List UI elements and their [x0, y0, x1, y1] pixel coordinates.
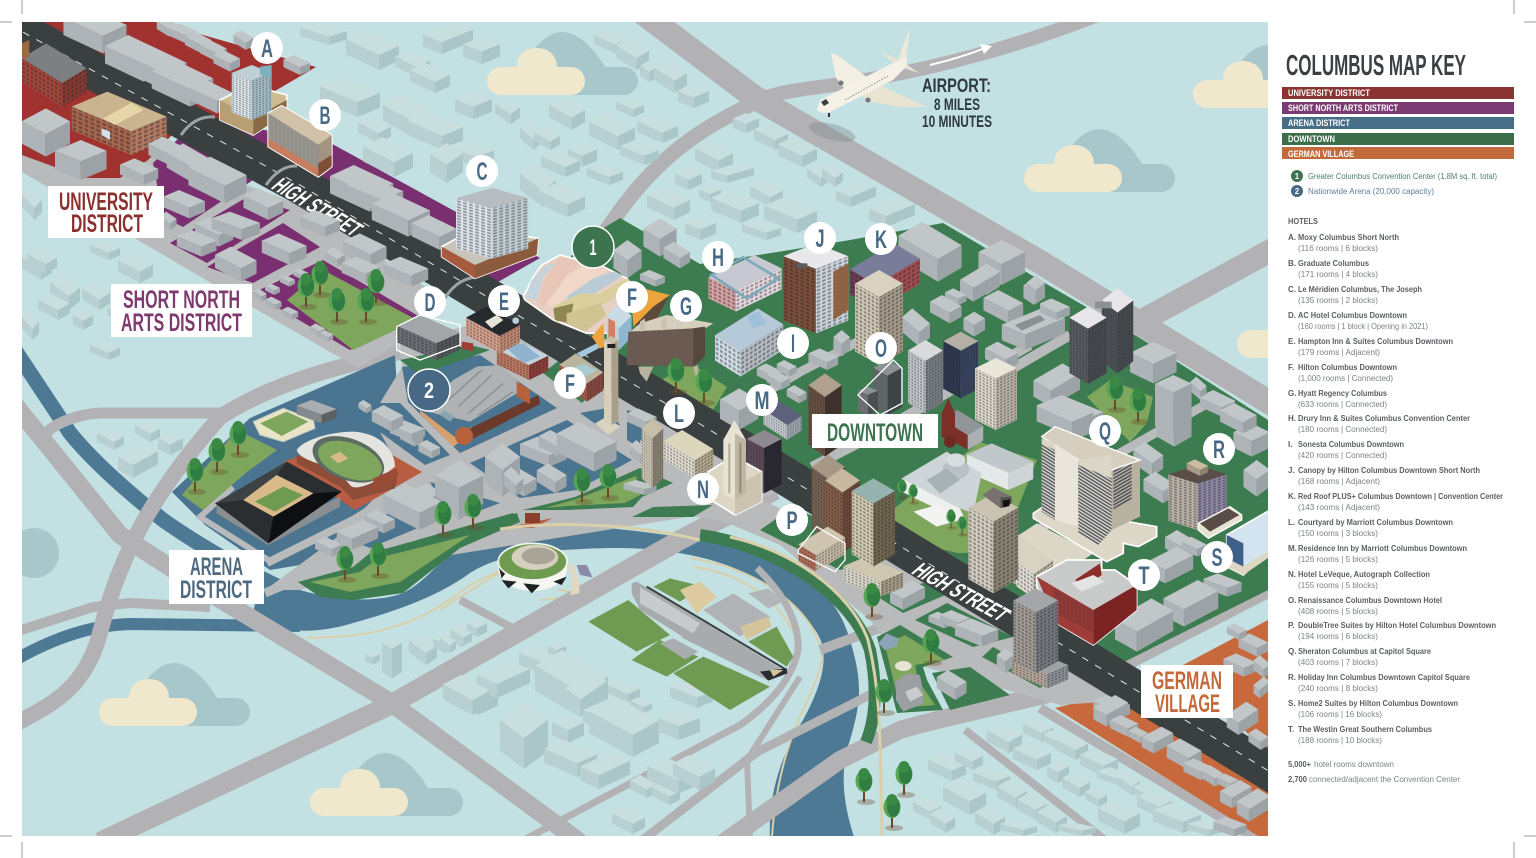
- building: Ohio Union: [72, 92, 167, 155]
- buildings: south park shell: [878, 633, 923, 712]
- hotel G: G.: [1288, 389, 1296, 398]
- hotel N: [1288, 570, 1430, 590]
- label: Arena District: [169, 550, 264, 604]
- downtown room totals: 2,700: [1288, 775, 1308, 784]
- building: Holiday Inn R: [1168, 459, 1242, 538]
- hotel letter badges: L: [674, 400, 684, 428]
- hotel N: (155 rooms | 5 blocks): [1298, 581, 1378, 590]
- hotel letter badges: O: [875, 335, 887, 363]
- hotel P: [1288, 621, 1496, 641]
- label: Arena District: DISTRICT: [180, 576, 252, 604]
- hotel F: (1,000 rooms | Connected): [1298, 374, 1393, 383]
- hotel C: [1288, 285, 1422, 305]
- hotel R: R.: [1288, 673, 1296, 682]
- district colour legend: UNIVERSITY DISTRICT: [1288, 88, 1370, 98]
- hotel R: Holiday Inn Columbus Downtown Capitol Square: [1298, 673, 1471, 682]
- hotel list: [1288, 233, 1503, 745]
- hotel Q: Q.: [1288, 647, 1296, 656]
- hotel O: [1288, 596, 1442, 616]
- building: Hilton F lower with skybridge: [497, 340, 607, 402]
- airport label: 8 MILES: [934, 95, 980, 114]
- hotel G: (633 rooms | Connected): [1298, 400, 1387, 409]
- hotel letter badges: [251, 32, 1235, 591]
- Downtown blocks north: [613, 218, 850, 430]
- building: Columbus tower near Holiday: [1012, 588, 1068, 688]
- district colour legend: SHORT NORTH ARTS DISTRICT: [1288, 103, 1398, 113]
- University and Short North blocks: [22, 7, 457, 342]
- building: Ohio Statehouse: [902, 443, 1033, 527]
- building: COSI science museum: [588, 578, 793, 710]
- building: Le Meridien C: [442, 188, 538, 278]
- hotel J: J.: [1288, 466, 1295, 475]
- downtown room totals: 5,000+: [1288, 760, 1311, 769]
- airplane: [817, 28, 927, 117]
- land: University District: [22, 22, 316, 178]
- hotel P: DoubleTree Suites by Hilton Hotel Columbus Downtown: [1298, 621, 1496, 630]
- tan river paths: [307, 558, 822, 836]
- district colour legend: DOWNTOWN: [1288, 134, 1335, 144]
- airplane shadow: [807, 118, 857, 146]
- hotel O: O.: [1288, 596, 1296, 605]
- hotel I: I.: [1288, 440, 1292, 449]
- buildings: Renaissance O and Downtown towers: [808, 332, 1017, 457]
- trees: [186, 261, 1149, 831]
- label: University District: [48, 186, 164, 238]
- building: Nationwide Arena: [420, 365, 540, 447]
- land: Arena District blue parcels: [345, 355, 643, 548]
- building: Center of Science dome: [498, 543, 593, 595]
- district colour legend: ARENA DISTRICT: [1288, 118, 1350, 128]
- hotel I: (420 rooms | Connected): [1298, 451, 1387, 460]
- building: Sheraton Q: [1033, 427, 1157, 562]
- hotel A: (116 rooms | 6 blocks): [1298, 244, 1378, 253]
- hotel D: AC Hotel Columbus Downtown: [1298, 311, 1407, 320]
- hotel C: C.: [1288, 285, 1296, 294]
- hotel Q: (403 rooms | 7 blocks): [1298, 658, 1378, 667]
- hotel F: F.: [1288, 363, 1294, 372]
- label: University District: DISTRICT: [71, 210, 143, 238]
- hotel M: [1288, 544, 1467, 564]
- hotel R: [1288, 673, 1471, 693]
- land: German Village: [1055, 620, 1268, 836]
- airport label: [922, 76, 992, 131]
- label: University District: UNIVERSITY: [59, 188, 153, 216]
- hotel T: [1288, 725, 1433, 745]
- hotel H: [1288, 414, 1470, 434]
- label: German Village: GERMAN: [1152, 667, 1222, 695]
- Downtown blocks east and south: [890, 377, 1270, 720]
- hotel H: Drury Inn & Suites Columbus Convention Center: [1298, 414, 1470, 423]
- label: German Village: VILLAGE: [1155, 690, 1220, 718]
- hotel letter badges: P: [786, 507, 798, 535]
- label: Arena District: ARENA: [190, 553, 243, 581]
- hotel E: [1288, 337, 1453, 357]
- building: Graduate B: [268, 106, 332, 177]
- hotel K: [1288, 492, 1503, 512]
- hotel A: Moxy Columbus Short North: [1298, 233, 1399, 242]
- label: Short North Arts District: SHORT NORTH: [123, 286, 240, 314]
- downtown room totals: [1288, 760, 1460, 784]
- hotel B: [1288, 259, 1378, 279]
- buildings: Canopy J, Red Roof K: [783, 243, 920, 365]
- hotel F: [1288, 363, 1397, 383]
- hotel G: [1288, 389, 1388, 409]
- hotel N: N.: [1288, 570, 1296, 579]
- land: Arena District street base: [265, 310, 790, 590]
- building: Hyatt F tower and Hyatt G: [592, 288, 713, 382]
- land: Short North Arts District: [153, 122, 540, 350]
- venue legend: 2: [1295, 187, 1300, 196]
- hotel Q: Sheraton Columbus at Capitol Square: [1298, 647, 1432, 656]
- hotel letter badges: A: [261, 35, 273, 63]
- hotel B: (171 rooms | 4 blocks): [1298, 270, 1378, 279]
- district colour legend: [1282, 87, 1514, 159]
- hotel letter badges: B: [320, 102, 330, 130]
- Downtown blocks north-east: [898, 222, 1103, 438]
- skybridges over High Street: [181, 117, 475, 300]
- hotel F: Hilton Columbus Downtown: [1298, 363, 1397, 372]
- hotel S: S.: [1288, 699, 1296, 708]
- hotel L: L.: [1288, 518, 1295, 527]
- hotel D: (160 rooms | 1 block | Opening in 2021): [1298, 322, 1428, 331]
- hotel letter badges: G: [680, 293, 692, 321]
- buildings: Drury H and Sonesta I: [708, 255, 783, 377]
- building: dark tower right: [1069, 288, 1133, 384]
- hotel letter badges: R: [1213, 436, 1225, 464]
- hotel T: T.: [1288, 725, 1294, 734]
- building: tall column tower: [595, 336, 620, 435]
- hotel L: [1288, 518, 1453, 538]
- hotel C: Le Méridien Columbus, The Joseph: [1298, 285, 1422, 294]
- hotel letter badges: Q: [1099, 418, 1111, 446]
- hotel M: Residence Inn by Marriott Columbus Downtown: [1298, 544, 1467, 553]
- hotel K: (143 rooms | Adjacent): [1298, 503, 1380, 512]
- label: Short North Arts District: ARTS DISTRICT: [121, 309, 242, 337]
- badge 1: [572, 226, 614, 268]
- downtown room totals: connected/adjacent the Convention Center: [1309, 775, 1460, 784]
- hotel E: E.: [1288, 337, 1296, 346]
- building: Moxy A: [220, 65, 287, 135]
- key panel: [1282, 50, 1514, 784]
- label: German Village: [1141, 665, 1233, 718]
- venue legend: 1: [1295, 172, 1300, 181]
- hotel I: Sonesta Columbus Downtown: [1298, 440, 1404, 449]
- hotel T: The Westin Great Southern Columbus: [1298, 725, 1433, 734]
- building: boathouse: [525, 513, 540, 523]
- hotel M: (126 rooms | 5 blocks): [1298, 555, 1378, 564]
- district colour legend: GERMAN VILLAGE: [1288, 149, 1354, 159]
- building: Home2 Suites S: [1227, 510, 1270, 575]
- hotel letter badges: C: [476, 158, 488, 186]
- High Street label south: HIGH STREET: [905, 559, 1016, 626]
- airport label: 10 MINUTES: [922, 112, 992, 131]
- venue legend: [1291, 170, 1497, 197]
- hotel H: (180 rooms | Connected): [1298, 425, 1387, 434]
- hotel letter badges: D: [424, 289, 436, 317]
- hotel N: Hotel LeVeque, Autograph Collection: [1298, 570, 1430, 579]
- label: Short North Arts District: [111, 284, 252, 337]
- land: south of High Street: [640, 440, 1130, 705]
- hotel B: B.: [1288, 259, 1296, 268]
- gray city buildings: [22, 7, 1270, 837]
- hotel S: Home2 Suites by Hilton Columbus Downtown: [1298, 699, 1458, 708]
- hotel letter badges: T: [1138, 562, 1150, 590]
- hotel letter badges: F: [627, 284, 637, 312]
- Arena area blocks: [400, 408, 657, 520]
- hotel L: (150 rooms | 3 blocks): [1298, 529, 1378, 538]
- German Village blocks: [1093, 623, 1270, 837]
- hotel P: (194 rooms | 6 blocks): [1298, 632, 1378, 641]
- hotel M: M.: [1288, 544, 1297, 553]
- hotel A: A.: [1288, 233, 1296, 242]
- hotel P: P.: [1288, 621, 1295, 630]
- building: Hampton Inn E and AC Hotel D: [397, 307, 520, 360]
- hotel Q: [1288, 647, 1432, 667]
- hotels heading: HOTELS: [1288, 217, 1319, 226]
- hotel A: [1288, 233, 1399, 253]
- hotel letter badges: N: [697, 476, 709, 504]
- hotel S: [1288, 699, 1458, 719]
- building: Convention Center: [523, 255, 633, 333]
- hotel R: (240 rooms | 8 blocks): [1298, 684, 1378, 693]
- hotel letter badges: M: [754, 387, 770, 415]
- hotel J: (168 rooms | Adjacent): [1298, 477, 1380, 486]
- venue legend: Greater Columbus Convention Center (1.8M sq. ft. total): [1308, 172, 1497, 181]
- High Street label north: HIGH STREET: [265, 174, 369, 241]
- hotel S: (106 rooms | 16 blocks): [1298, 710, 1382, 719]
- hotel letter badges: F: [565, 370, 575, 398]
- hotel letter badges: K: [875, 226, 887, 254]
- airport label: AIRPORT:: [922, 76, 991, 97]
- hotel H: H.: [1288, 414, 1296, 423]
- downtown room totals: hotel rooms downtown: [1314, 760, 1394, 769]
- hotel T: (188 rooms | 10 blocks): [1298, 736, 1382, 745]
- hotel letter badges: S: [1212, 544, 1222, 572]
- river: [15, 350, 859, 840]
- badge 2: [408, 369, 450, 411]
- building: Ohio State University hall: [22, 40, 87, 107]
- High Street road: [10, 25, 1290, 784]
- land: Arena District west: [172, 355, 396, 570]
- hotel J: Canopy by Hilton Columbus Downtown Short North: [1298, 466, 1480, 475]
- hotel letter badges: E: [499, 288, 509, 316]
- land: gray base of Short North: [22, 150, 430, 368]
- hotel E: Hampton Inn & Suites Columbus Downtown: [1298, 337, 1453, 346]
- hotel C: (135 rooms | 2 blocks): [1298, 296, 1378, 305]
- label: Downtown: [812, 414, 938, 448]
- river-side green strip and path: [500, 525, 882, 836]
- hotel O: (408 rooms | 5 blocks): [1298, 607, 1378, 616]
- hotel J: [1288, 466, 1480, 486]
- hotel L: Courtyard by Marriott Columbus Downtown: [1298, 518, 1453, 527]
- map panel: [22, 22, 1268, 836]
- downtown side streets: [720, 330, 1210, 545]
- hotel O: Renaissance Columbus Downtown Hotel: [1298, 596, 1442, 605]
- airport arrow: [930, 44, 992, 65]
- small green parcels and lawns: [182, 270, 1153, 713]
- hotel K: Red Roof PLUS+ Columbus Downtown | Convention Center: [1298, 492, 1503, 501]
- hotel K: K.: [1288, 492, 1296, 501]
- building: Westin T: [1037, 560, 1137, 645]
- building: church: [942, 398, 983, 450]
- hotel D: [1288, 311, 1428, 331]
- hotel E: (179 rooms | Adjacent): [1298, 348, 1380, 357]
- hotel D: D.: [1288, 311, 1296, 320]
- buildings: P DoubleTree and neighbours: [798, 455, 903, 597]
- buildings: Courtyard L, Residence Inn M, LeVeque N: [642, 400, 802, 515]
- hotel I: [1288, 440, 1404, 460]
- pale outlying buildings: [22, 22, 1222, 836]
- hotel B: Graduate Columbus: [1298, 259, 1370, 268]
- arena streets: [195, 486, 366, 598]
- hotel G: Hyatt Regency Columbus: [1298, 389, 1388, 398]
- label: Downtown: DOWNTOWN: [827, 419, 923, 447]
- hotel letter badges: J: [816, 225, 824, 253]
- hotel letter badges: H: [712, 244, 724, 272]
- badge 2: 2: [424, 378, 434, 403]
- venue legend: Nationwide Arena (20,000 capacity): [1308, 187, 1434, 196]
- land: Downtown: [525, 218, 1268, 668]
- building: arena ballpark and stadium: [215, 400, 398, 545]
- hotel letter badges: I: [791, 330, 795, 358]
- building: LeVeque neighbour tower and podium: [968, 487, 1093, 597]
- badge 1: 1: [590, 235, 596, 260]
